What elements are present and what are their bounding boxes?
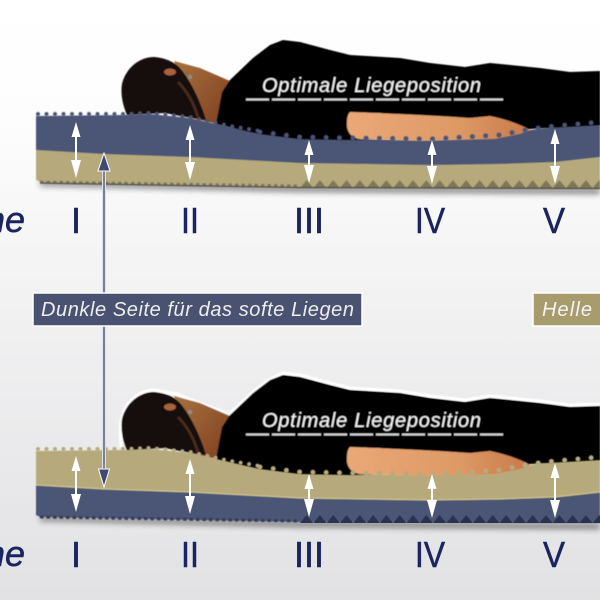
head with hair xyxy=(121,392,206,455)
dark lower layer xyxy=(36,484,600,523)
caption: Optimale Liegeposition: Optimale Liegeposition xyxy=(262,75,481,97)
dark upper layer xyxy=(36,114,600,165)
zone labels, bottom row: II xyxy=(181,534,199,575)
zone labels, top row: II xyxy=(181,200,199,241)
black torso xyxy=(216,375,600,475)
zone labels, bottom row: III xyxy=(294,534,324,575)
label: dark side xyxy=(33,293,362,326)
neck and shoulder xyxy=(174,396,230,460)
arm and hand xyxy=(347,447,530,476)
panel: top mattress, dark side up xyxy=(36,114,600,194)
zone labels, top row: I xyxy=(71,200,81,241)
foam bumps along top mattress surface xyxy=(38,113,600,139)
mattress shadow xyxy=(40,517,600,529)
connector arrow between mattresses xyxy=(98,153,110,487)
arm and hand xyxy=(347,112,530,141)
white halo xyxy=(120,373,600,447)
white double arrows, bottom mattress xyxy=(71,456,560,518)
caption dashes xyxy=(246,98,504,100)
ear xyxy=(164,404,176,410)
zone labels, bottom row: V xyxy=(543,534,565,575)
head with hair xyxy=(121,57,206,120)
foam bumps along bottom mattress surface xyxy=(38,448,600,474)
caption: Optimale Liegeposition: Optimale Liegeposition xyxy=(262,410,481,432)
caption dashes xyxy=(246,434,504,436)
label: light side: Helle xyxy=(542,299,592,321)
mattress shadow xyxy=(40,182,600,194)
zone labels, bottom row: I xyxy=(71,534,81,575)
tan upper layer xyxy=(36,449,600,500)
white double arrows, top mattress xyxy=(71,122,560,184)
black torso xyxy=(216,40,600,140)
bottom foam teeth, left xyxy=(40,517,300,521)
zone labels, bottom row: IV xyxy=(415,534,445,575)
person lying on bottom mattress xyxy=(120,373,600,476)
person lying on top mattress xyxy=(121,40,600,141)
earring xyxy=(188,410,192,414)
zone labels, top row: III xyxy=(294,200,324,241)
zone labels, bottom row xyxy=(0,533,565,575)
hair strands xyxy=(178,82,198,117)
tan/dark seam xyxy=(36,485,600,500)
neck and shoulder xyxy=(174,61,230,125)
label: light side xyxy=(533,293,600,326)
bottom foam teeth, right xyxy=(300,179,600,188)
bottom foam teeth, right xyxy=(300,514,600,523)
earring xyxy=(188,75,192,79)
mattress bottom edge xyxy=(40,183,600,188)
zone labels, top row: IV xyxy=(415,200,445,241)
zone labels, top row: V xyxy=(543,200,565,241)
zone labels, top row xyxy=(0,199,565,241)
hair strands xyxy=(178,417,198,452)
ear xyxy=(164,68,176,76)
bottom foam teeth, left xyxy=(40,182,300,186)
panel: bottom mattress, light side up xyxy=(36,449,600,529)
tan lower layer xyxy=(36,149,600,188)
label: dark side: Dunkle Seite für das softe Liegen xyxy=(41,299,354,321)
